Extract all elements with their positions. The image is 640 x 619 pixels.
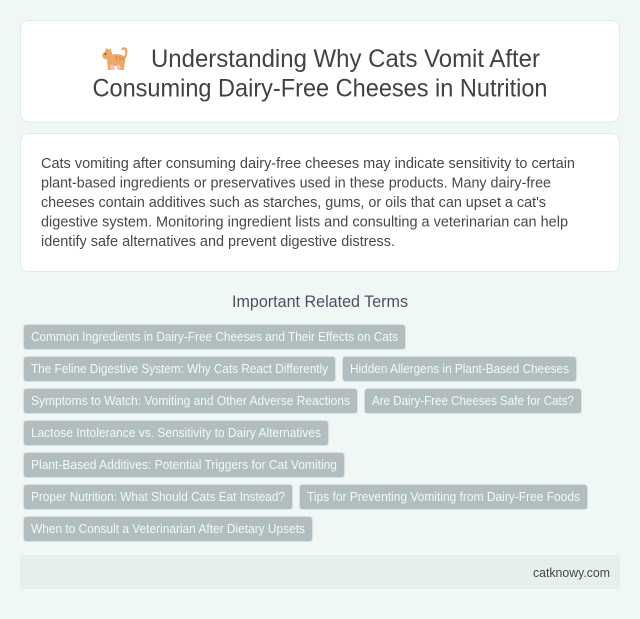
tag: hidden allergens [342, 356, 576, 382]
panel: description card [20, 134, 620, 272]
tag: common ingredients [24, 324, 406, 350]
text block: description [41, 155, 575, 250]
text block: description: identify safe alternatives and prevent digestive distress. [41, 233, 395, 250]
icon: cat [102, 47, 127, 70]
panel: title card [20, 20, 620, 122]
tag: proper nutrition [24, 484, 292, 510]
tag list: related terms [24, 324, 588, 542]
tag: when to consult [24, 516, 312, 542]
tag: safety [364, 388, 582, 414]
title [92, 46, 548, 102]
tag: prevention tips: Tips for Preventing Vomiting from Dairy-Free Foods [307, 489, 580, 504]
text block: description: Cats vomiting after consuming dairy-free cheeses may indicate sensitivity to certain [41, 155, 575, 172]
tag: lactose intolerance: Lactose Intolerance vs. Sensitivity to Dairy Alternatives [31, 425, 321, 440]
title: Understanding Why Cats Vomit After [151, 46, 540, 73]
tag: hidden allergens: Hidden Allergens in Plant-Based Cheeses [350, 361, 569, 376]
footer: catknowy.com [533, 565, 610, 580]
footer [20, 555, 620, 589]
tag: feline digestive system [24, 356, 336, 382]
tag: proper nutrition: Proper Nutrition: What Should Cats Eat Instead? [31, 489, 285, 504]
tag: common ingredients: Common Ingredients in Dairy-Free Cheeses and Their Effects on Cats [31, 329, 398, 344]
tag: plant-based additives: Plant-Based Additives: Potential Triggers for Cat Vomiting [31, 457, 337, 472]
tag: lactose intolerance [24, 420, 328, 446]
text block: description: digestive system. Monitoring ingredient lists and consulting a veterinarian can help [41, 214, 568, 231]
tag: safety: Are Dairy-Free Cheeses Safe for Cats? [372, 393, 574, 408]
tag: when to consult: When to Consult a Veterinarian After Dietary Upsets [31, 521, 305, 536]
tag: plant-based additives [24, 452, 344, 478]
tag: prevention tips [300, 484, 588, 510]
title: Consuming Dairy-Free Cheeses in Nutrition [92, 76, 548, 102]
tag: symptoms [24, 388, 358, 414]
heading: related terms: Important Related Terms [232, 293, 408, 311]
tag: feline digestive system: The Feline Digestive System: Why Cats React Differently [31, 361, 329, 376]
text block: description: plant-based ingredients or preservatives used in these products. Many dairy-free [41, 175, 551, 192]
tag: symptoms: Symptoms to Watch: Vomiting and Other Adverse Reactions [31, 393, 350, 408]
text block: description: cheeses contain additives such as starches, gums, or oils that can upset a cat's [41, 194, 546, 211]
